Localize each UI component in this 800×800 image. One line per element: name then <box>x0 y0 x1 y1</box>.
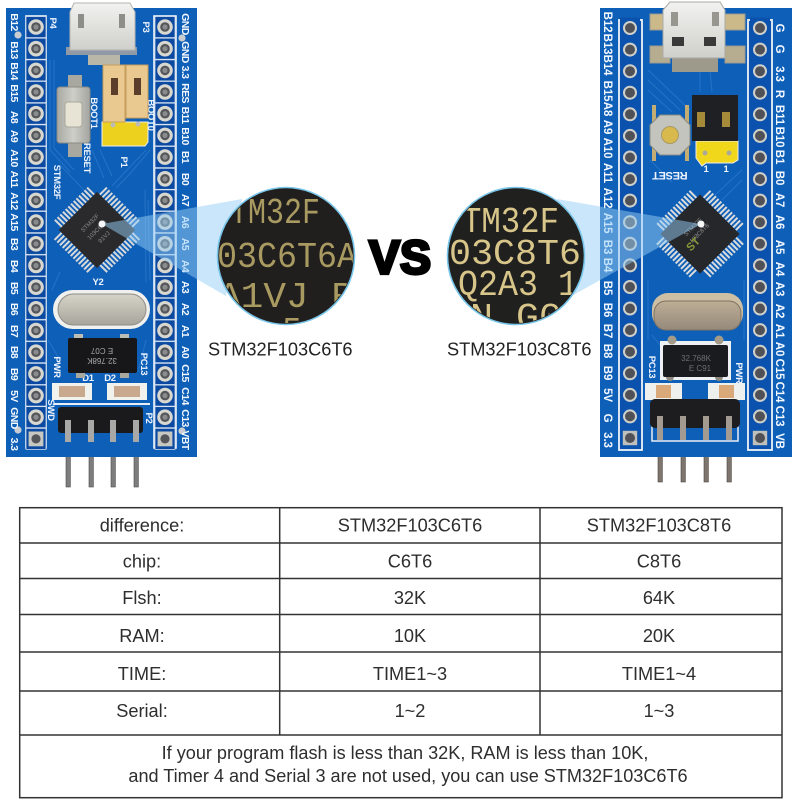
icon: status LEDs, left board <box>52 383 147 400</box>
pin labels, left edge of left board: A8 <box>8 111 20 124</box>
icon: 32.768K clock crystal, left board: E C07 <box>90 346 113 355</box>
silkscreen labels, right board: 1 <box>724 164 730 175</box>
row: flash: 64K <box>643 588 675 608</box>
row: RAM: 10K <box>394 626 426 646</box>
pin labels, left edge of right board: B7 <box>601 324 613 338</box>
table grid <box>20 508 782 798</box>
pin labels, right edge of left board: GND <box>179 41 191 64</box>
row: difference: STM32F103C6T6 <box>338 516 482 536</box>
recommendation note: If your program flash is less than 32K, RAM is less than 10K, <box>162 743 648 763</box>
pin labels, right edge of right board: G <box>773 45 785 54</box>
icon: crystal oscillator, right board <box>652 293 743 330</box>
pin labels, left edge of left board <box>8 13 20 451</box>
mounting holes, left board <box>14 31 186 435</box>
pin labels, right edge of right board: C14 <box>773 382 785 403</box>
pin labels, left edge of right board: G <box>601 414 613 423</box>
row: timers: TIME1~3 <box>373 664 447 684</box>
pad column frames, left board <box>26 16 176 448</box>
pin labels, right edge of right board: 3.3 <box>773 66 785 82</box>
label: left chip model: STM32F103C6T6 <box>208 340 353 360</box>
pin labels, left edge of left board: B9 <box>8 368 20 381</box>
pin labels, left edge of right board: A8 <box>601 102 613 117</box>
pin labels, left edge of left board: 5V <box>8 390 20 402</box>
silkscreen labels, right board: 1 <box>704 164 710 175</box>
pin labels, left edge of left board: A11 <box>8 171 20 188</box>
recommendation note <box>128 743 688 786</box>
pin labels, left edge of right board: B13 <box>601 34 613 54</box>
panel: left board STM32F103C6T6 <box>6 3 197 487</box>
silkscreen labels, left board: Y2 <box>92 277 104 288</box>
icon: reset button, right board <box>650 105 690 161</box>
magnifier: C8T6 chip marking <box>448 188 584 339</box>
pin labels, right edge of left board: A4 <box>179 260 191 273</box>
pin labels, right edge of left board: A6 <box>179 216 191 229</box>
pin labels, left edge of right board: B8 <box>601 344 613 359</box>
icon: crystal oscillator, left board <box>53 290 150 329</box>
pin labels, right edge of left board: GND <box>179 13 191 36</box>
row: chip: C6T6 <box>388 552 432 572</box>
icon: 32.768K clock crystal, right board <box>660 336 731 381</box>
icon: SWD pin header, left board <box>54 403 150 442</box>
magnifier: C8T6 chip marking: N G0 <box>470 298 562 339</box>
row: flash: 32K <box>394 588 426 608</box>
silkscreen labels, left board: P1 <box>118 156 129 169</box>
row: serial <box>116 701 674 721</box>
icon: reset button, left board <box>57 75 90 157</box>
silkscreen labels, left board: STM32F <box>51 165 62 200</box>
pin labels, right edge of right board: C13 <box>773 406 785 426</box>
chip: STM32F103C6T6 on left board <box>52 185 142 275</box>
pin labels, left edge of right board: 5V <box>601 388 613 402</box>
pin labels, right edge of right board: A7 <box>773 193 785 207</box>
icon: 32.768K clock crystal, left board <box>68 334 137 378</box>
pin labels, left edge of left board: B6 <box>8 303 20 316</box>
icon: micro USB connector, right board <box>650 2 745 72</box>
header pins, left board <box>66 420 138 487</box>
panel: right board STM32F103C8T6 <box>600 2 792 482</box>
pin labels, left edge of right board: B3 <box>601 240 613 254</box>
pin labels, right edge of left board: A5 <box>179 238 191 251</box>
chip: STM32F103C6T6 on left board: STM32F <box>80 213 101 234</box>
icon: boot jumpers, left board <box>102 65 148 146</box>
pin labels, right edge of right board: A3 <box>773 282 785 296</box>
silkscreen labels, right board <box>646 164 744 384</box>
row: chip: C8T6 <box>637 552 681 572</box>
pin labels, right edge of left board: RES <box>179 83 191 103</box>
comparison table <box>20 508 782 798</box>
silkscreen labels, left board: SWD <box>45 399 56 421</box>
pin labels, right edge of left board: VBT <box>179 430 191 451</box>
magnifier: C6T6 chip marking <box>216 186 356 326</box>
pin labels, right edge of left board: 3.3 <box>179 66 191 79</box>
silkscreen labels, left board: PWR <box>51 356 62 378</box>
pin labels, right edge of right board: VB <box>773 433 785 449</box>
pin labels, left edge of right board <box>601 12 613 448</box>
silkscreen labels, left board: BOOT1 <box>88 97 99 130</box>
pin labels, left edge of right board: B5 <box>601 281 613 296</box>
pin labels, left edge of left board: 3.3 <box>8 438 20 451</box>
pin labels, left edge of left board: B14 <box>8 62 20 80</box>
pin labels, left edge of right board: A15 <box>601 213 613 234</box>
pin labels, left edge of left board: B4 <box>8 260 20 273</box>
pin labels, left edge of left board: B3 <box>8 238 20 251</box>
icon: status LEDs, right board <box>645 383 745 400</box>
magnifier: C8T6 chip marking: 03C8T6 <box>449 234 581 275</box>
pin labels, right edge of left board: C13 <box>179 409 191 427</box>
pin labels, right edge of right board: G <box>773 24 785 33</box>
chip: STM32F103C8T6 on right board <box>653 187 747 281</box>
silkscreen labels, right board: RESET <box>652 169 688 181</box>
row: chip: chip: <box>123 552 161 572</box>
chip: STM32F103C6T6 on left board: 103C6T6 <box>87 219 109 242</box>
row: serial: 1~2 <box>395 701 425 721</box>
icon: 32.768K clock crystal, right board: 32.768K <box>681 354 712 363</box>
silkscreen labels, left board: PC13 <box>138 353 149 375</box>
pad column frames, right board <box>619 20 772 450</box>
pin labels, left edge of right board: B6 <box>601 303 613 317</box>
silkscreen labels, left board: BOOT0 <box>145 99 156 131</box>
chip locator dot, right <box>698 220 704 228</box>
pin labels, left edge of left board: B15 <box>8 84 20 102</box>
pin labels, right edge of right board: A2 <box>773 304 785 318</box>
row: RAM: RAM: <box>119 626 165 646</box>
icon: micro USB connector, left board <box>66 3 137 65</box>
silkscreen labels, left board: D1 <box>82 373 95 384</box>
callout beam: right chip to magnifier <box>557 199 701 304</box>
pin labels, right edge of right board: B10 <box>773 127 785 147</box>
icon: 32.768K clock crystal, left board: 32.768K <box>86 356 117 365</box>
pin labels, right edge of left board: B1 <box>179 151 191 164</box>
label: right chip model: STM32F103C8T6 <box>447 340 592 360</box>
pin labels, left edge of left board: B8 <box>8 346 20 359</box>
pin labels, right edge of right board: B11 <box>773 105 785 126</box>
magnifier: C6T6 chip marking: 5 <box>282 312 302 353</box>
silkscreen labels, right board: PC13 <box>646 356 657 378</box>
pin labels, left edge of left board: B5 <box>8 282 20 295</box>
pin labels, right edge of right board: C15 <box>773 359 785 380</box>
magnifier: C8T6 chip marking: TM32F <box>462 202 559 243</box>
PCB, right board <box>600 8 792 457</box>
pin labels, right edge of left board: B0 <box>179 173 191 186</box>
callout beam: left chip to magnifier <box>102 199 242 296</box>
pin labels, right edge of right board: R <box>773 90 785 99</box>
pin labels, left edge of left board: B13 <box>8 41 20 59</box>
chip: STM32F103C6T6 on left board: 91VJ <box>98 231 112 245</box>
pin labels, left edge of right board: B15 <box>601 81 613 102</box>
pin labels, right edge of right board: A4 <box>773 262 785 277</box>
pin labels, right edge of left board <box>179 13 191 451</box>
pin labels, left edge of right board: B4 <box>601 258 613 273</box>
pin labels, right edge of left board: B10 <box>179 127 191 145</box>
solder pads, right column of left board <box>155 16 175 449</box>
solder pads, right column of right board <box>750 18 770 448</box>
traces, right board <box>648 70 744 345</box>
pin labels, left edge of right board: A12 <box>601 188 613 208</box>
pin labels, right edge of right board: B1 <box>773 150 785 165</box>
pin labels, right edge of left board: A3 <box>179 281 191 294</box>
pin labels, left edge of right board: B9 <box>601 366 613 380</box>
pin labels, left edge of left board: A15 <box>8 213 20 231</box>
pin labels, right edge of right board: A1 <box>773 324 785 339</box>
pin labels, right edge of left board: A2 <box>179 303 191 316</box>
magnifier: C6T6 chip marking: 03C6T6A <box>217 237 357 278</box>
VS heading: VS <box>369 230 431 284</box>
header pins, right board <box>658 420 731 482</box>
row: flash: Flsh: <box>122 588 162 608</box>
pin labels, right edge of right board: A6 <box>773 215 785 229</box>
row: timers <box>118 664 696 684</box>
pin labels, right edge of right board: B0 <box>773 171 785 185</box>
pin labels, left edge of left board: GND <box>8 407 20 430</box>
pin labels, left edge of right board: A9 <box>601 120 613 134</box>
pin labels, right edge of left board: B11 <box>179 107 191 124</box>
row: difference: difference: <box>100 516 184 536</box>
pin labels, left edge of right board: A10 <box>601 138 613 158</box>
pin labels, left edge of left board: A12 <box>8 192 20 210</box>
pin labels, right edge of left board: C14 <box>179 387 191 405</box>
solder pads, left column of right board <box>620 18 640 448</box>
silkscreen labels, left board: P4 <box>47 17 58 30</box>
pin labels, right edge of left board: C15 <box>179 364 191 382</box>
pin labels, left edge of right board: B14 <box>601 55 613 76</box>
pin labels, right edge of left board: A0 <box>179 346 191 359</box>
recommendation note: and Timer 4 and Serial 3 are not used, you can use STM32F103C6T6 <box>128 766 688 786</box>
icon: SWD pin header, right board <box>650 399 740 441</box>
row: difference: STM32F103C8T6 <box>587 516 731 536</box>
silkscreen labels, left board: D2 <box>104 373 116 384</box>
chip locator dot, left <box>98 220 106 228</box>
pin labels, left edge of right board: B12 <box>601 12 613 32</box>
row: flash <box>122 588 675 608</box>
row: difference <box>100 516 731 536</box>
chip: STM32F103C8T6 on right board: 103C8T6 <box>689 223 711 245</box>
silkscreen labels, left board: RESET <box>81 143 92 174</box>
pin labels, right edge of right board: A5 <box>773 240 785 255</box>
icon: 32.768K clock crystal, right board: E C91 <box>689 364 712 373</box>
chip: STM32F103C8T6 on right board: ST <box>684 235 703 254</box>
pin labels, left edge of left board: A9 <box>8 130 20 143</box>
PCB, left board <box>6 8 197 457</box>
pin labels, left edge of left board: B7 <box>8 325 20 338</box>
silkscreen labels, right board: PWR <box>733 362 744 384</box>
row: timers: TIME: <box>118 664 166 684</box>
magnifier: C6T6 chip marking: A1VJ R <box>218 277 354 318</box>
pin labels, left edge of right board: 3.3 <box>601 432 613 448</box>
pin labels, left edge of left board: A10 <box>8 149 20 167</box>
pin labels, right edge of right board: A0 <box>773 342 785 356</box>
silkscreen labels, left board: P2 <box>143 412 154 424</box>
icon: boot jumpers, right board <box>692 95 738 166</box>
chip: STM32F103C8T6 on right board: STM32F <box>683 217 704 238</box>
pin labels, right edge of left board: A1 <box>179 325 191 338</box>
magnifier: C6T6 chip marking: TM32F <box>230 193 320 234</box>
traces, left board <box>48 60 150 372</box>
row: RAM: 20K <box>643 626 675 646</box>
pin labels, right edge of left board: A7 <box>179 194 191 207</box>
solder pads, left column of left board <box>26 16 46 449</box>
pin labels, right edge of right board <box>773 24 785 449</box>
row: timers: TIME1~4 <box>622 664 696 684</box>
row: RAM <box>119 626 675 646</box>
row: serial: 1~3 <box>644 701 674 721</box>
pin labels, left edge of right board: A11 <box>601 163 613 184</box>
silkscreen labels, left board <box>45 17 156 424</box>
row: chip <box>123 552 681 572</box>
magnifier: C8T6 chip marking: Q2A3 1 <box>458 265 578 306</box>
row: serial: Serial: <box>116 701 168 721</box>
silkscreen labels, left board: P3 <box>140 21 151 33</box>
pin labels, left edge of left board: B12 <box>8 13 20 31</box>
